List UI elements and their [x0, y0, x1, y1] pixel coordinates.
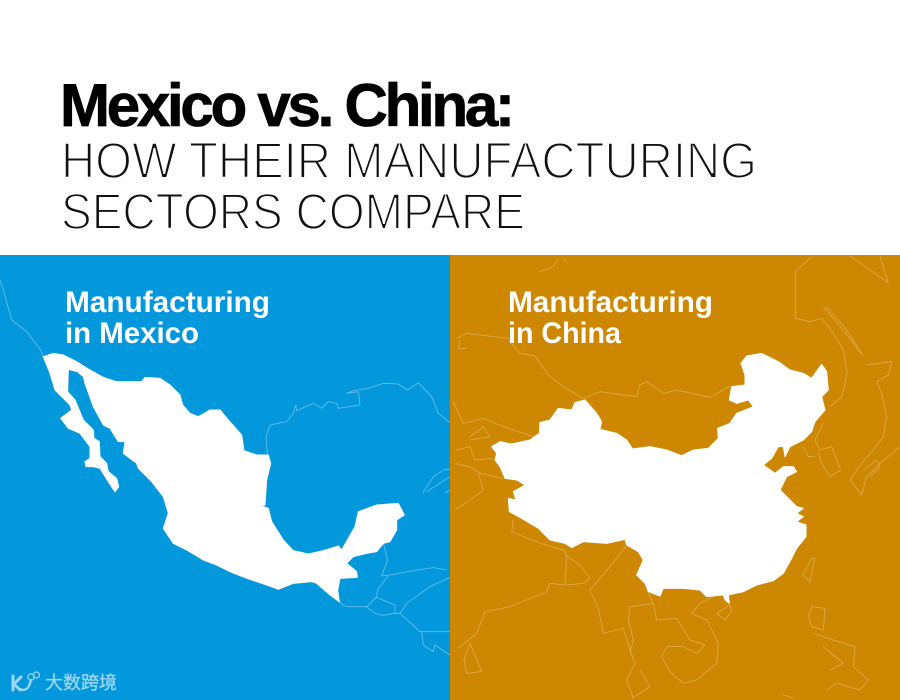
panel: Mexico — [0, 255, 450, 700]
heading: Manufacturing in Mexico — [65, 286, 270, 350]
map: Mexico — [43, 353, 404, 602]
neighbouring borders: China panel — [453, 256, 900, 698]
map: China — [492, 353, 828, 603]
heading: Manufacturing in Mexico: Manufacturing — [65, 286, 270, 319]
subtitle line 2: SECTORS COMPARE — [61, 183, 525, 240]
heading: Manufacturing in China: Manufacturing — [508, 286, 713, 319]
neighbouring borders: Mexico panel — [0, 280, 450, 655]
panel: China — [450, 255, 900, 700]
watermark logo — [13, 672, 40, 690]
heading: Manufacturing in China — [508, 286, 713, 350]
title line: Mexico vs. China: Mexico vs. China: — [60, 72, 515, 139]
heading: Manufacturing in Mexico: in Mexico — [65, 317, 199, 350]
heading: Manufacturing in China: in China — [508, 317, 621, 350]
subtitle line 1: HOW THEIR MANUFACTURING — [61, 132, 757, 189]
title — [60, 72, 757, 240]
watermark text: 大数跨境 — [45, 673, 117, 693]
